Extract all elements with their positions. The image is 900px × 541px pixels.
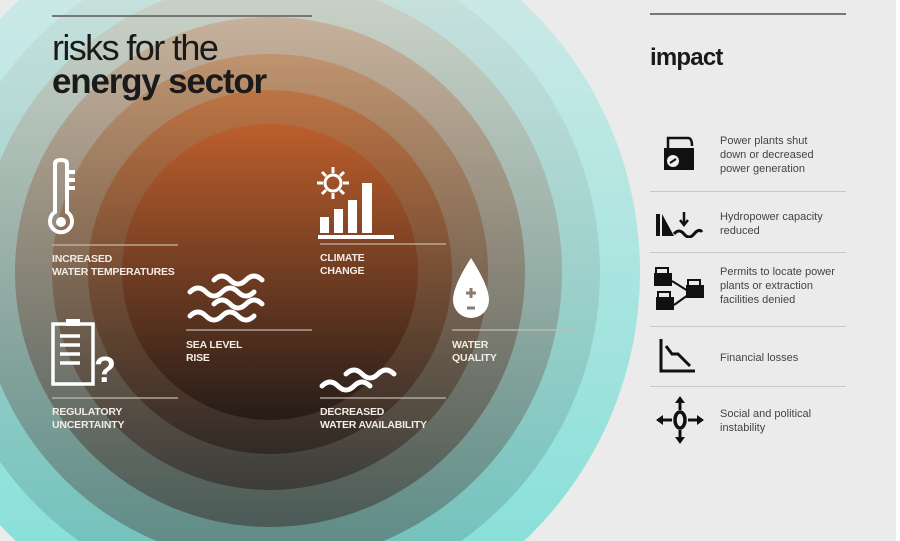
impact: social instability [656, 396, 811, 444]
impact: permits: facilities denied [720, 294, 795, 306]
impact: permits: plants or extraction [720, 280, 813, 292]
icon: climate change [317, 167, 394, 239]
label: climate change [320, 252, 364, 277]
icon: decreased water waves [320, 368, 396, 392]
label: decreased water availability: DECREASED [320, 406, 384, 418]
label: decreased water availability [320, 406, 427, 431]
impact: social instability: instability [720, 422, 765, 434]
label: increased water temperatures [52, 253, 175, 278]
impact: power plants: down or decreased [720, 149, 814, 161]
impact: financial losses [660, 339, 798, 372]
label: water quality [452, 339, 497, 364]
label: sea level rise: RISE [186, 352, 210, 364]
label: increased water temperatures: WATER TEMPERATURES [52, 266, 175, 278]
label: regulatory uncertainty [52, 406, 124, 431]
impact: hydropower: Hydropower capacity [720, 211, 823, 223]
label: sea level rise: SEA LEVEL [186, 339, 242, 351]
label: sea level rise [186, 339, 242, 364]
impact: power plants [664, 135, 814, 175]
icon: water drop [453, 258, 489, 318]
impact: social instability: Social and political [720, 408, 811, 420]
heading: impact: impact [650, 44, 723, 71]
impact: permits [654, 266, 835, 310]
label: climate change: CLIMATE [320, 252, 364, 264]
impact: hydropower: reduced [720, 225, 760, 237]
icon: regulatory clipboard: ? [94, 349, 116, 390]
icon: thermometer [48, 158, 75, 234]
label: increased water temperatures: INCREASED [52, 253, 112, 265]
impact: power plants: Power plants shut [720, 135, 807, 147]
icon: sea level waves [188, 274, 264, 322]
impact: permits: Permits to locate power [720, 266, 835, 278]
impact: hydropower [656, 211, 823, 238]
label: regulatory uncertainty: REGULATORY [52, 406, 122, 418]
label: water quality: QUALITY [452, 352, 497, 364]
icon: regulatory clipboard [51, 319, 116, 390]
label: water quality: WATER [452, 339, 488, 351]
title: energy sector [52, 62, 266, 101]
impact: power plants: power generation [720, 163, 805, 175]
label: regulatory uncertainty: UNCERTAINTY [52, 419, 124, 431]
title: risks for the [52, 27, 217, 68]
impact: financial losses: Financial losses [720, 352, 798, 364]
label: decreased water availability: WATER AVAILABILITY [320, 419, 427, 431]
title [52, 27, 267, 101]
label: climate change: CHANGE [320, 265, 364, 277]
